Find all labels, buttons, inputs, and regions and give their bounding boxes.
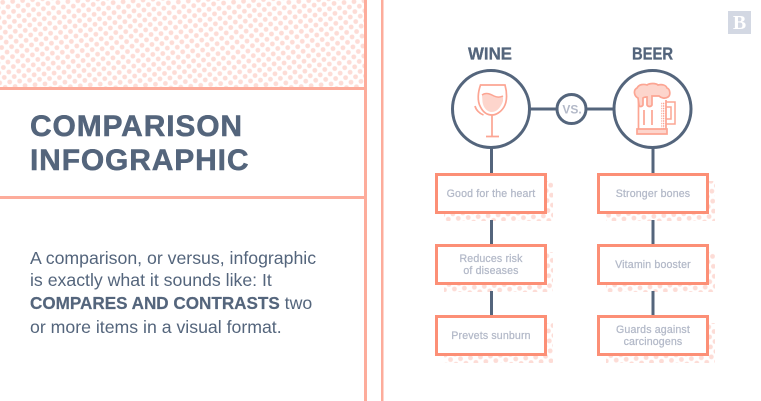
logo badge: B: [733, 12, 746, 34]
description text: is exactly what it sounds like: It: [30, 270, 272, 290]
wine box 3: [435, 315, 547, 356]
beer box 1: [597, 173, 709, 214]
vs circle: [557, 94, 586, 124]
wine box 2: Reduces risk: [459, 253, 523, 265]
description text: COMPARES AND CONTRASTS two: [30, 293, 312, 313]
wine heading: WINE: [468, 44, 512, 64]
title: [30, 110, 249, 176]
connectors: [490, 108, 654, 315]
beer heading: BEER: [632, 44, 673, 64]
beer box 2: Vitamin booster: [615, 259, 691, 271]
wine circle: [452, 70, 530, 148]
icon: beer mug: [634, 84, 675, 134]
box shadows: dotted: [444, 181, 715, 363]
beer box 1: Stronger bones: [616, 188, 690, 200]
wine box 1: [435, 173, 547, 214]
beer box 3: carcinogens: [624, 336, 682, 348]
beer box 2: [597, 244, 709, 285]
logo badge: [728, 11, 751, 34]
wine box 1: Good for the heart: [447, 188, 535, 200]
wine box 2: of diseases: [463, 264, 519, 276]
icon: wine glass: [475, 85, 507, 136]
title: INFOGRAPHIC: [30, 144, 249, 176]
description text: or more items in a visual format.: [30, 317, 282, 337]
dotted header band: [0, 0, 364, 87]
beer box 3: Guards against: [616, 324, 690, 336]
description text: A comparison, or versus, infographic: [30, 248, 316, 268]
description text: [30, 248, 316, 337]
vs circle: VS.: [562, 102, 582, 116]
beer circle: [614, 70, 691, 148]
wine box 3: Prevets sunburn: [451, 330, 531, 342]
title: COMPARISON: [30, 110, 243, 143]
wine box 2: [435, 244, 547, 285]
beer box 3: [597, 315, 709, 356]
